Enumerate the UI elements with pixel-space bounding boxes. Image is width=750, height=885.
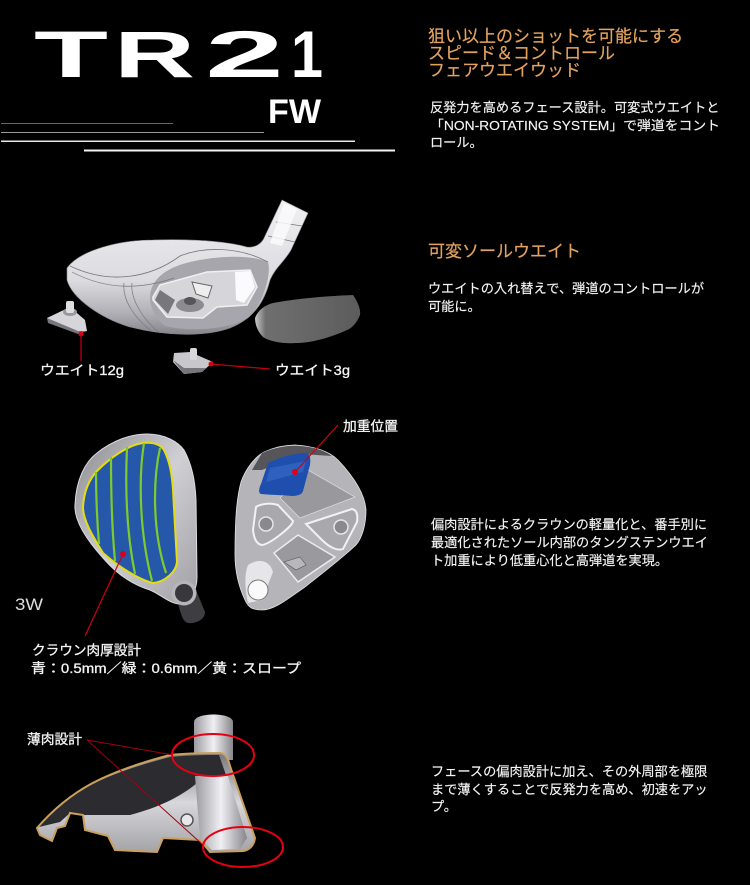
hosel <box>172 580 196 606</box>
heading: main: フェアウエイウッド <box>428 61 581 80</box>
cavity surround <box>150 257 269 329</box>
label: 3W: 3W <box>15 595 43 614</box>
text block: face: プ。 <box>431 799 457 814</box>
text block: intro: 反発力を高めるフェース設計。可変式ウエイトと <box>430 99 719 115</box>
weight port: right <box>334 520 348 534</box>
crown outline <box>75 434 197 604</box>
label: crown thickness: クラウン肉厚設計 <box>32 643 142 658</box>
text block: face <box>431 764 708 814</box>
leader: 12g <box>78 332 84 361</box>
illustration: crown view <box>75 434 205 636</box>
sole outline <box>235 445 366 610</box>
screw <box>181 814 193 826</box>
hosel top <box>194 714 233 760</box>
text block: intro: 「NON-ROTATING SYSTEM」で弾道をコント <box>430 118 720 133</box>
dark crown interior <box>39 755 226 827</box>
club head body <box>67 200 308 334</box>
illustration: cutaway head <box>27 714 283 867</box>
blue panel <box>83 443 177 583</box>
logo: TR21: R <box>114 17 195 91</box>
logo: TR21: T <box>34 17 108 91</box>
blue weight <box>259 453 310 496</box>
label: weight position: 加重位置 <box>343 419 398 434</box>
weight 3g <box>173 348 213 374</box>
text block: intro: ロール。 <box>430 135 483 150</box>
text block: crown and tungsten: 最適化されたソール内部のタングステンウエイ <box>431 535 708 550</box>
head interior floor <box>37 753 255 852</box>
weight pocket: right <box>306 509 357 550</box>
gold shell <box>37 753 255 852</box>
green lines <box>96 443 166 581</box>
illustration: sole view <box>235 419 398 610</box>
leader: crown <box>85 551 126 636</box>
text block: face: まで薄くすることで反発力を高め、初速をアッ <box>431 781 708 797</box>
text block: sole weight: 可能に。 <box>428 299 481 314</box>
logo: TR21: 1 <box>291 17 323 91</box>
heading: sole weight: 可変ソールウエイト <box>428 242 581 261</box>
highlight ellipse: top <box>172 734 254 776</box>
leaders: thin wall <box>87 740 203 845</box>
label: thin wall: 薄肉設計 <box>27 732 83 747</box>
logo: TR21: 2 <box>205 17 284 91</box>
text block: face: フェースの偏肉設計に加え、その外周部を極限 <box>431 764 707 779</box>
label: crown thickness <box>31 643 302 676</box>
shaft <box>177 590 205 623</box>
leader: 3g <box>208 362 270 369</box>
heading: main: 狙い以上のショットを可能にする <box>428 27 683 46</box>
text block: sole weight <box>428 281 704 314</box>
logo: FW: FW <box>268 93 322 131</box>
heading: main: スピード＆コントロール <box>428 44 615 63</box>
text block: crown and tungsten <box>431 517 708 568</box>
weight pocket: left <box>253 504 293 545</box>
highlight ellipse: bottom <box>203 827 283 867</box>
face plate <box>255 295 360 343</box>
label: 12g: ウエイト12g <box>40 363 124 378</box>
centre panel <box>280 470 355 518</box>
label: 3g: ウエイト3g <box>275 363 350 378</box>
face opening <box>153 270 257 318</box>
logo: TR21 <box>34 17 323 91</box>
text block: intro <box>430 99 720 150</box>
leader: weight position <box>292 425 338 475</box>
text block: crown and tungsten: 偏肉設計によるクラウンの軽量化と、番手別に <box>431 517 707 532</box>
text block: sole weight: ウエイトの入れ替えで、弾道のコントロールが <box>428 281 704 296</box>
rear pocket <box>274 535 335 582</box>
heading: main <box>428 27 683 80</box>
illustration: exploded club head <box>40 200 360 378</box>
text block: crown and tungsten: ト加重により低重心化と高弾道を実現。 <box>431 552 668 568</box>
hosel end <box>245 561 273 603</box>
hosel inner <box>195 776 247 850</box>
weight 12g <box>47 301 87 334</box>
label: crown thickness: 青：0.5mm／緑：0.6mm／黄：スロープ <box>31 661 302 676</box>
weight port: left <box>259 517 273 531</box>
